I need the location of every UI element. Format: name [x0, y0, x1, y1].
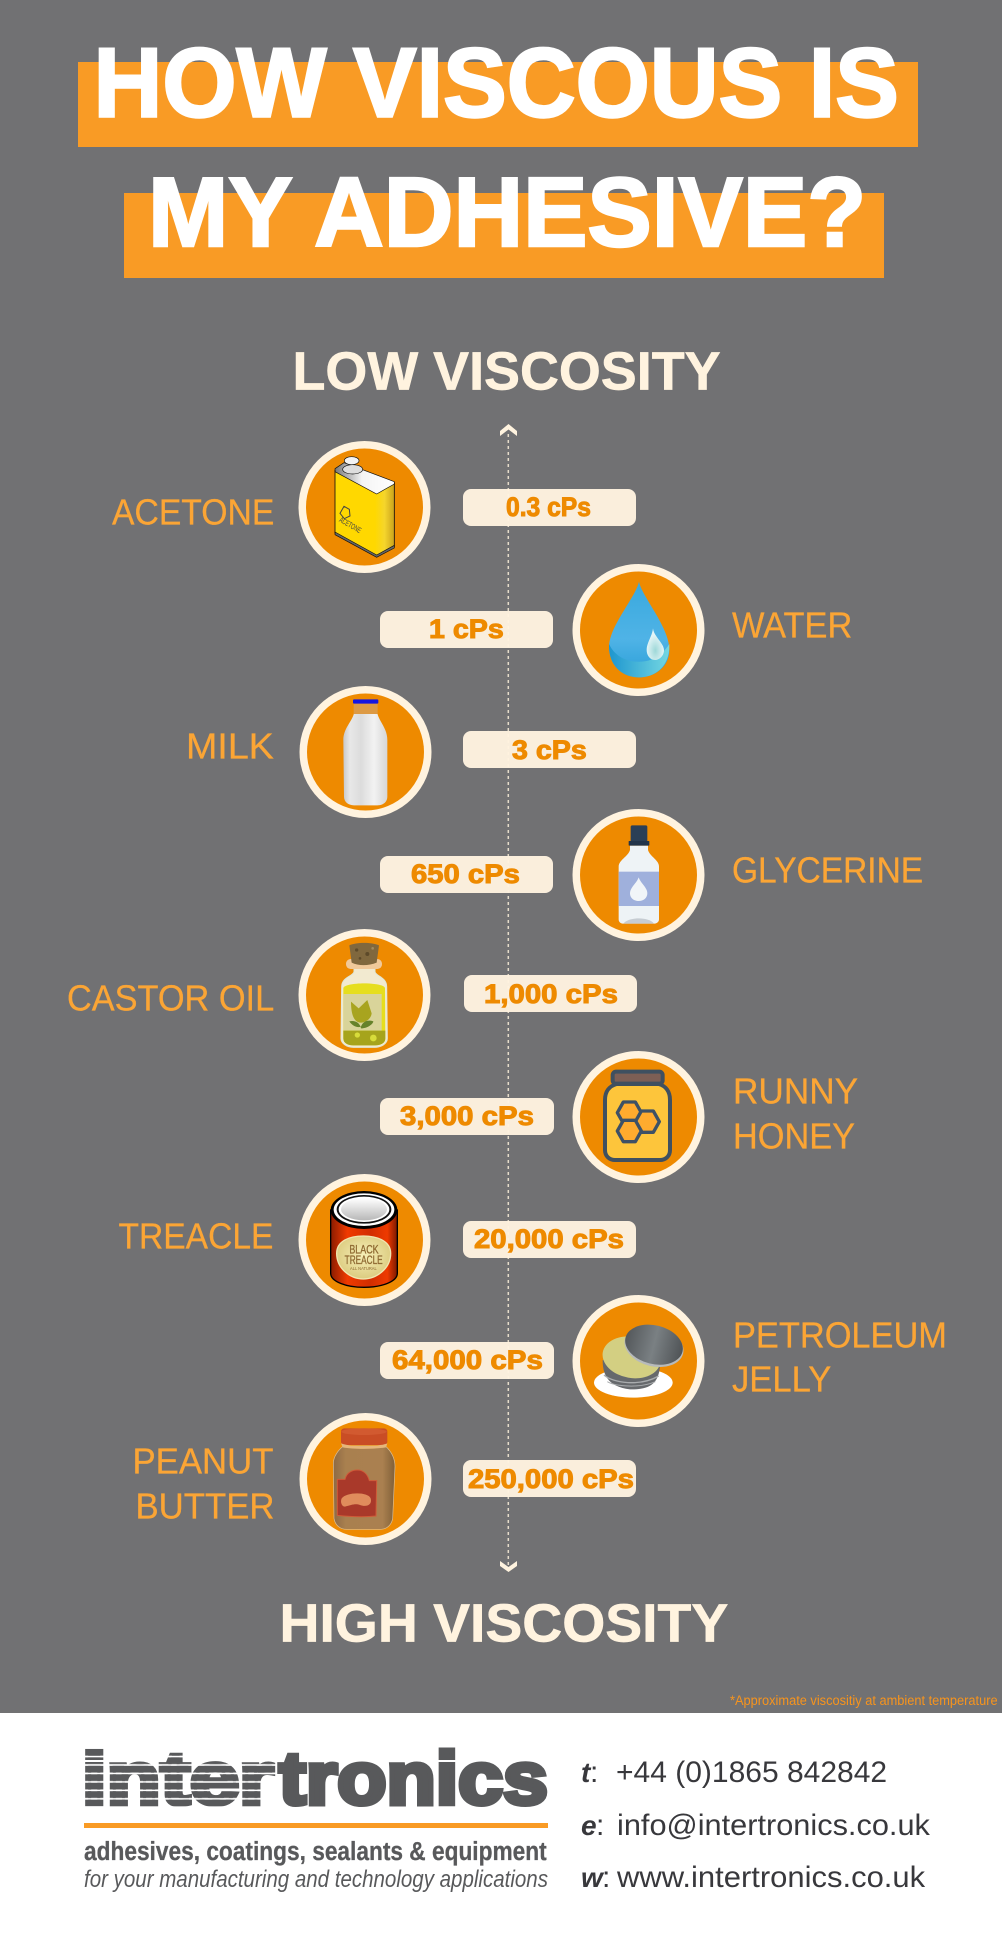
icon: peanut butter jar [300, 1413, 432, 1545]
tagline: for your manufacturing and technology applications [84, 1866, 548, 1892]
label: petroleum jelly: PETROLEUM [733, 1316, 947, 1356]
item: milk [186, 686, 636, 818]
value pill: glycerine: 650 cPs [411, 859, 520, 889]
logo: intertronics: tronics [279, 1738, 548, 1820]
icon: treacle can: ALL NATURAL [350, 1266, 377, 1271]
contact: website: : [602, 1861, 610, 1894]
item: acetone [112, 441, 636, 573]
label: peanut butter: BUTTER [136, 1487, 274, 1527]
label: acetone: ACETONE [112, 493, 274, 533]
icon: treacle can: BLACK [349, 1243, 379, 1257]
value pill: acetone [463, 489, 636, 526]
icon: acetone tin: ACETONE [337, 516, 363, 536]
value pill: milk: 3 cPs [512, 735, 587, 765]
item: water [380, 564, 852, 696]
footer panel [0, 1713, 1002, 1942]
contact: website: www.intertronics.co.uk [616, 1860, 926, 1894]
viscosity scale arrow [500, 424, 517, 1572]
value pill: glycerine [380, 856, 553, 893]
item: castor oil [67, 929, 637, 1061]
label: runny honey: RUNNY [733, 1071, 858, 1112]
icon: petroleum jelly tin [572, 1295, 704, 1427]
title bar: line two [124, 193, 884, 278]
icon: water drop [572, 564, 704, 696]
item: glycerine [380, 809, 923, 941]
label: runny honey: HONEY [733, 1117, 855, 1157]
label: water: WATER [732, 606, 852, 646]
contact: website: w [581, 1862, 605, 1893]
icon: treacle can: TREACLE [345, 1255, 383, 1267]
tagline [84, 1838, 548, 1892]
icon: castor oil bottle [298, 929, 430, 1061]
item: runny honey [380, 1051, 858, 1183]
heading: low viscosity: LOW VISCOSITY [292, 341, 721, 402]
contact: email: : [596, 1809, 604, 1842]
label: peanut butter [132, 1442, 274, 1527]
logo: intertronics [82, 1738, 548, 1828]
item: treacle [118, 1174, 636, 1306]
value pill: castor oil [464, 975, 637, 1012]
value pill: castor oil: 1,000 cPs [484, 978, 618, 1009]
label: peanut butter: PEANUT [132, 1442, 273, 1482]
value pill: milk [463, 731, 636, 768]
title [78, 27, 918, 278]
icon: acetone tin [298, 441, 430, 573]
label: runny honey [733, 1071, 858, 1157]
title line one: HOW VISCOUS IS [94, 27, 899, 138]
contact: telephone: t [581, 1757, 592, 1788]
footnote: *Approximate viscositiy at ambient temperature [730, 1692, 998, 1708]
label: castor oil: CASTOR OIL [67, 979, 274, 1019]
label: treacle: TREACLE [118, 1216, 273, 1257]
label: petroleum jelly: JELLY [732, 1360, 831, 1400]
value pill: water [380, 611, 553, 648]
label: milk: MILK [186, 726, 274, 766]
icon: treacle can [298, 1174, 430, 1306]
value pill: runny honey [380, 1098, 554, 1135]
contact: email: info@intertronics.co.uk [617, 1809, 931, 1842]
heading: high viscosity: HIGH VISCOSITY [280, 1593, 728, 1653]
label: petroleum jelly [732, 1316, 947, 1400]
icon: honey jar [572, 1051, 704, 1183]
icon: glycerine bottle [572, 809, 704, 941]
contact: telephone: +44 (0)1865 842842 [616, 1756, 887, 1789]
contact: email: e [581, 1810, 597, 1841]
title bar: line one [78, 62, 918, 147]
value pill: peanut butter: 250,000 cPs [468, 1464, 634, 1494]
item: peanut butter [132, 1413, 636, 1545]
title line two: MY ADHESIVE? [148, 157, 866, 267]
value pill: petroleum jelly: 64,000 cPs [392, 1344, 543, 1375]
value pill: treacle: 20,000 cPs [474, 1223, 624, 1254]
value pill: acetone: 0.3 cPs [506, 493, 591, 522]
contact: telephone: : [590, 1756, 598, 1789]
logo: intertronics: inter [82, 1738, 274, 1820]
value pill: water: 1 cPs [429, 614, 504, 644]
tagline: adhesives, coatings, sealants & equipment [84, 1838, 547, 1866]
value pill: runny honey: 3,000 cPs [400, 1100, 534, 1131]
label: glycerine: GLYCERINE [732, 851, 923, 891]
icon: milk bottle [300, 686, 432, 818]
item: petroleum jelly [380, 1295, 947, 1427]
